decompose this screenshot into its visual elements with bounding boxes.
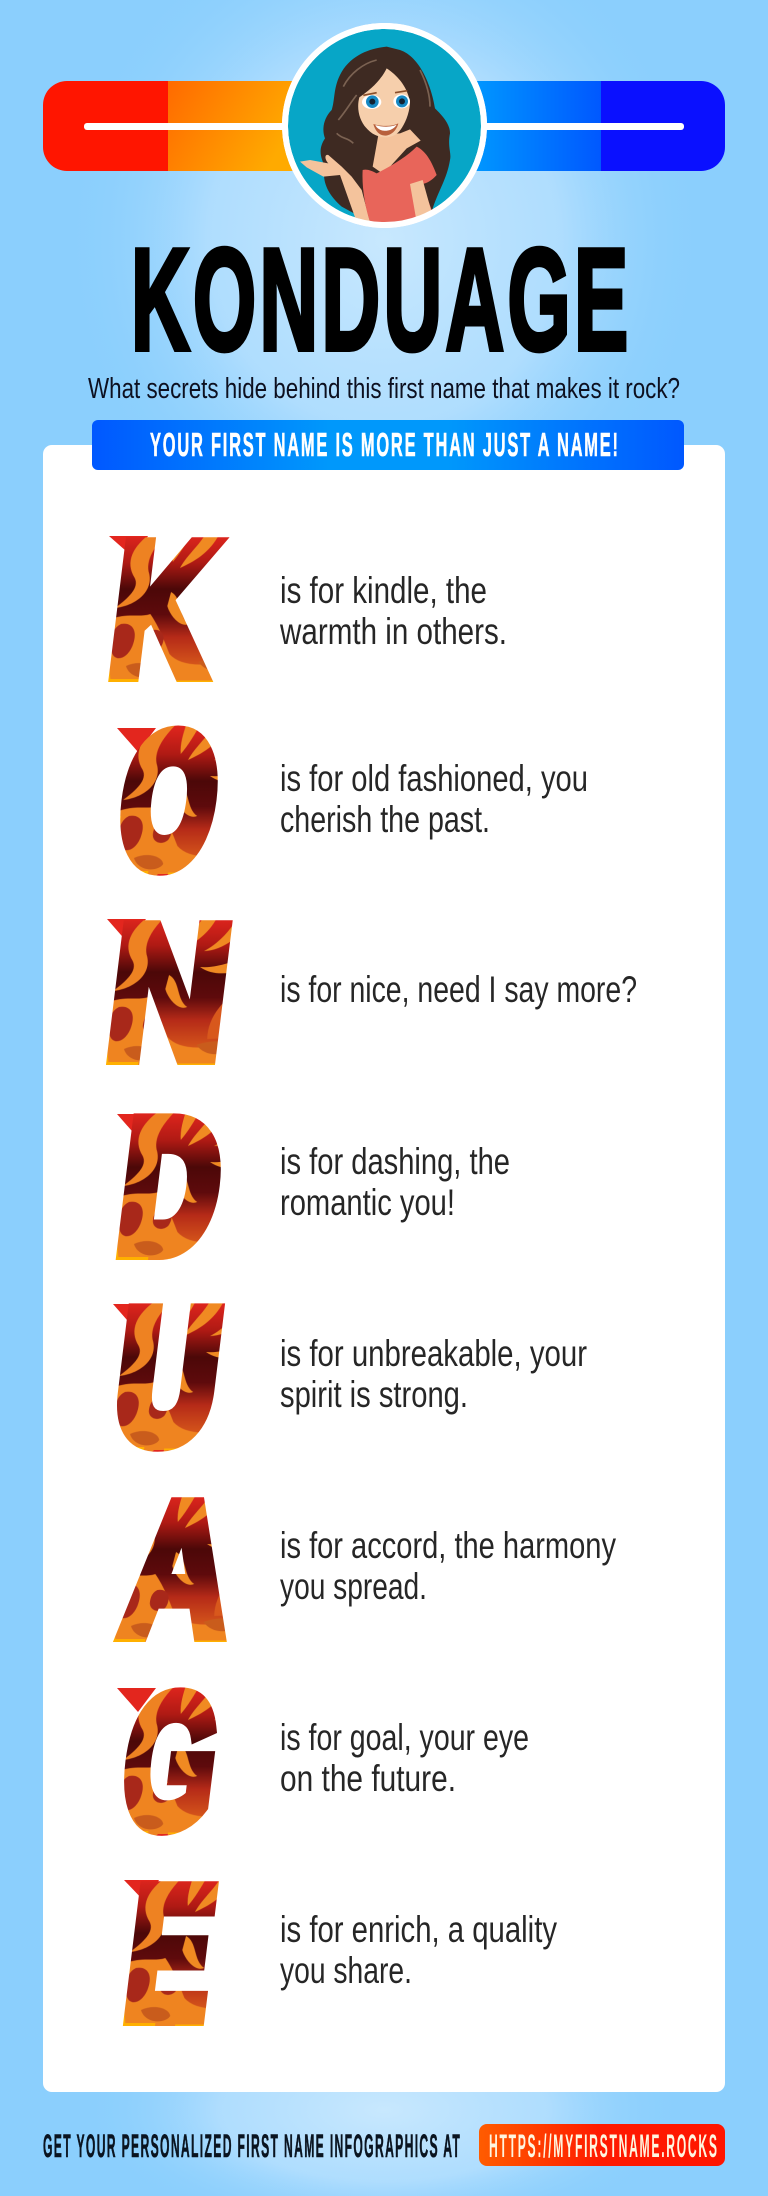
text: A meaning: is for accord, the harmony xyxy=(280,1525,616,1566)
fire letter G xyxy=(112,1656,230,1868)
text: D meaning xyxy=(280,1141,510,1223)
row: D xyxy=(110,1085,510,1290)
text: U meaning: spirit is strong. xyxy=(280,1374,468,1415)
text: E meaning: you share. xyxy=(280,1950,412,1991)
text: U meaning xyxy=(280,1333,587,1415)
footer call to action: GET YOUR PERSONALIZED FIRST NAME INFOGRAPHICS AT xyxy=(43,2129,460,2165)
fire letter E: E xyxy=(115,1848,226,2060)
row: N xyxy=(97,887,637,1099)
title: KONDUAGE xyxy=(131,219,632,380)
text: A meaning xyxy=(280,1525,616,1607)
row: E xyxy=(115,1848,557,2060)
text: D meaning: romantic you! xyxy=(280,1182,455,1223)
row: K xyxy=(100,504,507,716)
text: N meaning: is for nice, need I say more? xyxy=(280,969,637,1010)
header colour bar xyxy=(43,81,725,171)
fire letter N: N xyxy=(97,887,242,1099)
text: K meaning: is for kindle, the xyxy=(280,570,487,611)
text: K meaning xyxy=(279,570,507,652)
fire letter O: O xyxy=(110,699,228,904)
row: O xyxy=(110,699,588,904)
footer url button: HTTPS://MYFIRSTNAME.ROCKS xyxy=(489,2129,717,2165)
text: K meaning: warmth in others. xyxy=(279,611,507,652)
row: U xyxy=(106,1275,587,1480)
row: G xyxy=(112,1656,529,1868)
text: O meaning xyxy=(280,758,588,840)
banner xyxy=(92,420,684,470)
row: A xyxy=(113,1464,616,1676)
text: A meaning: you spread. xyxy=(280,1566,427,1607)
avatar: cartoon woman in a circle xyxy=(285,26,484,225)
text: G meaning: on the future. xyxy=(280,1758,456,1799)
text: G meaning: is for goal, your eye xyxy=(280,1717,529,1758)
fire letter G: G xyxy=(112,1656,230,1868)
banner: YOUR FIRST NAME IS MORE THAN JUST A NAME! xyxy=(150,426,618,464)
text: O meaning: is for old fashioned, you xyxy=(280,758,588,799)
fire letter O xyxy=(110,699,228,904)
fire letter U: U xyxy=(106,1275,230,1480)
text: D meaning: is for dashing, the xyxy=(280,1141,510,1182)
fire letter K: K xyxy=(100,504,226,716)
text: O meaning: cherish the past. xyxy=(280,799,490,840)
fire letter D: D xyxy=(110,1085,231,1290)
text: U meaning: is for unbreakable, your xyxy=(280,1333,587,1374)
text: E meaning xyxy=(280,1909,557,1991)
text: E meaning: is for enrich, a quality xyxy=(280,1909,557,1950)
white content panel xyxy=(43,445,725,2092)
text: G meaning xyxy=(280,1717,529,1799)
fire letter A: A xyxy=(113,1464,245,1676)
